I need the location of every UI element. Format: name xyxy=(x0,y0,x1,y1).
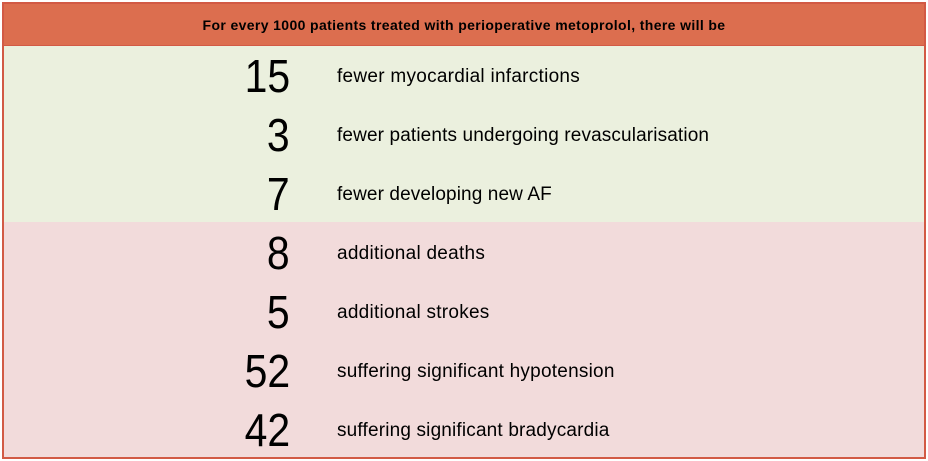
row: new AF: 7 xyxy=(267,168,290,220)
row: hypotension: suffering significant hypotension xyxy=(337,361,615,382)
row: revascularisation: 3 xyxy=(267,109,290,161)
row: strokes: 5 xyxy=(267,286,290,338)
row: new AF: fewer developing new AF xyxy=(337,184,552,205)
heading: For every 1000 patients treated with perioperative metoprolol, there will be xyxy=(203,17,725,33)
row: new AF xyxy=(267,168,552,220)
row: myocardial infarctions: 15 xyxy=(244,50,290,102)
header band xyxy=(4,4,924,46)
row: deaths: 8 xyxy=(267,227,290,279)
row: hypotension xyxy=(244,345,615,397)
row: revascularisation: fewer patients undergoing revascularisation xyxy=(337,125,709,146)
row: deaths: additional deaths xyxy=(337,243,485,264)
row: bradycardia: 42 xyxy=(244,404,290,456)
panel: benefits xyxy=(4,46,924,222)
row: myocardial infarctions xyxy=(244,50,580,102)
row: bradycardia xyxy=(244,404,610,456)
row: deaths xyxy=(267,227,485,279)
row: hypotension: 52 xyxy=(244,345,290,397)
panel: harms xyxy=(4,222,924,457)
row: myocardial infarctions: fewer myocardial infarctions xyxy=(337,66,580,87)
row: bradycardia: suffering significant bradycardia xyxy=(337,420,609,441)
row: strokes xyxy=(267,286,490,338)
row: strokes: additional strokes xyxy=(337,302,490,323)
row: revascularisation xyxy=(267,109,709,161)
